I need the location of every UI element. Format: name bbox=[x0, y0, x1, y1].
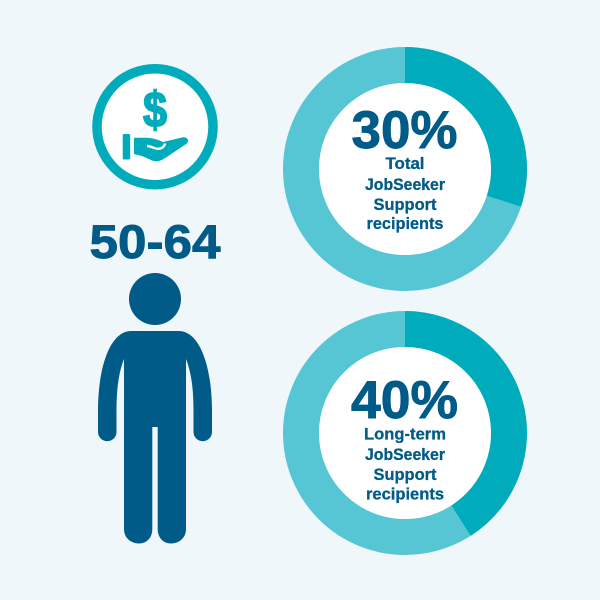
donut value: 30%: 30% bbox=[352, 101, 458, 160]
donut caption: long-term recipients: Long-term bbox=[364, 424, 446, 444]
donut chart: 30% total recipients bbox=[301, 47, 527, 273]
icon: hand holding dollar bbox=[97, 69, 213, 185]
donut caption: total recipients: Total bbox=[386, 154, 424, 173]
donut caption: long-term recipients: JobSeeker bbox=[365, 445, 445, 464]
icon: person bbox=[98, 273, 212, 544]
donut caption: long-term recipients: recipients bbox=[366, 484, 444, 504]
donut value: 40%: 40% bbox=[351, 371, 458, 430]
icon: hand holding dollar: $ bbox=[143, 82, 167, 138]
donut caption: total recipients bbox=[365, 154, 445, 233]
donut caption: total recipients: recipients bbox=[366, 214, 444, 233]
donut caption: total recipients: Support bbox=[374, 195, 437, 214]
donut caption: long-term recipients bbox=[364, 424, 446, 504]
age label: 50-64 bbox=[90, 215, 220, 268]
donut chart: 40% long-term recipients bbox=[301, 311, 527, 537]
donut caption: long-term recipients: Support bbox=[374, 465, 437, 484]
donut caption: total recipients: JobSeeker bbox=[365, 175, 445, 194]
